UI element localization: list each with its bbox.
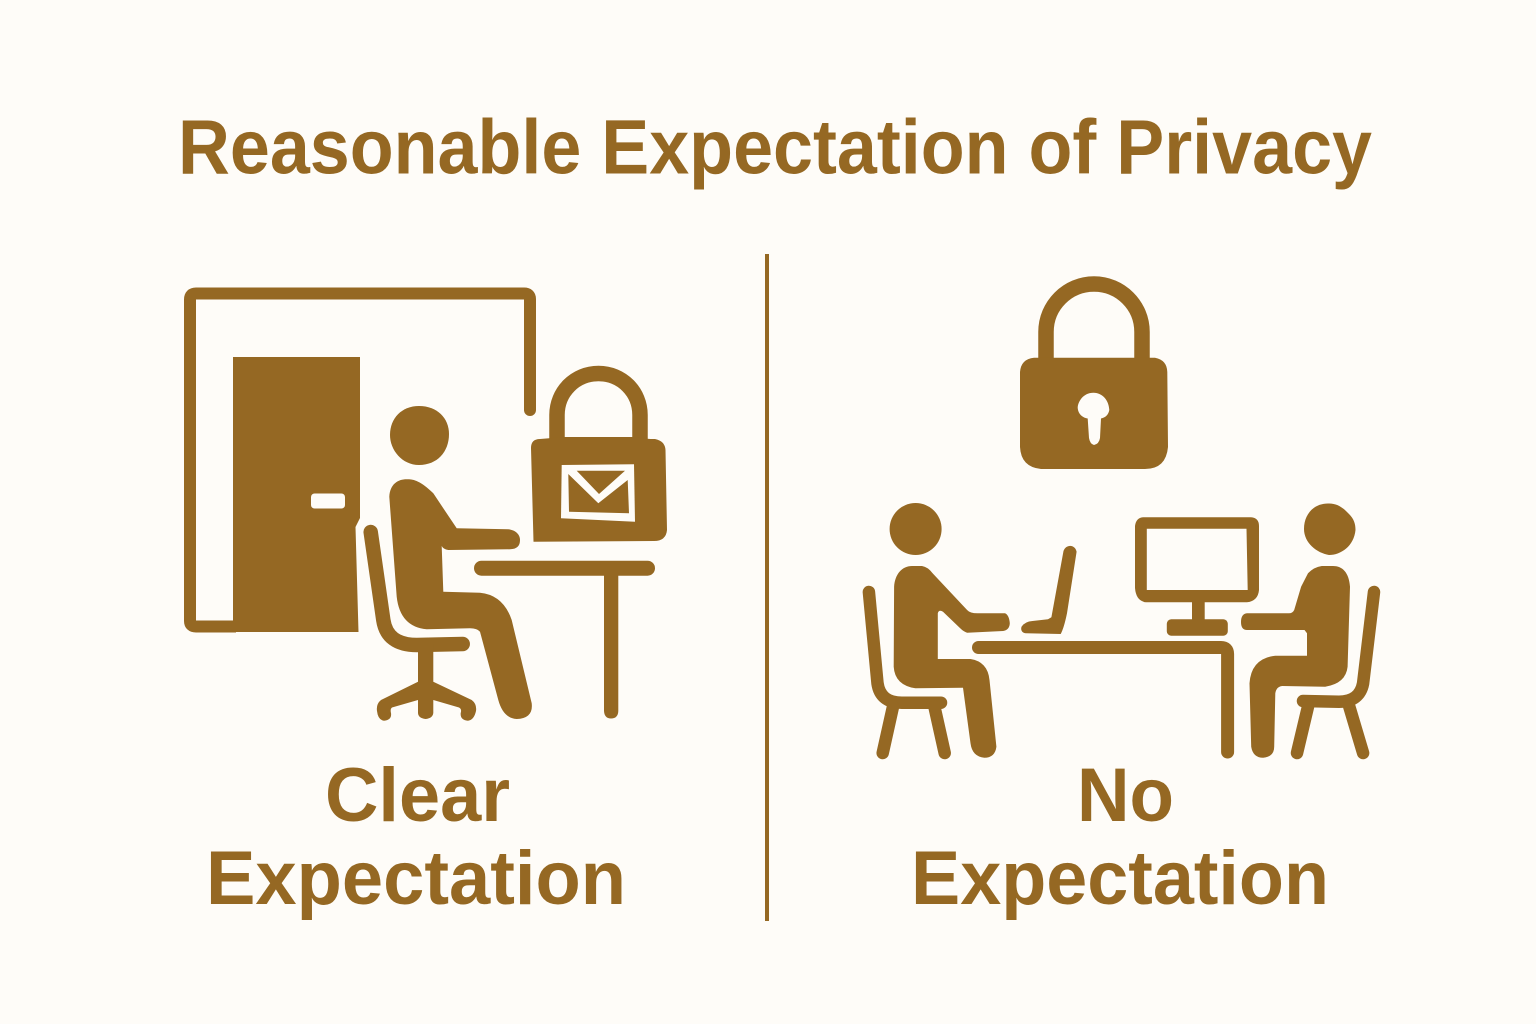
icon: room wall and door frame [190, 294, 530, 626]
label: no expectation: Expectation [911, 836, 1329, 921]
center divider [765, 254, 769, 921]
label: clear expectation: Clear [325, 753, 510, 838]
label: no expectation: No [1077, 753, 1174, 838]
panel: clear expectation [190, 294, 667, 921]
icon: large padlock [1020, 284, 1168, 469]
icon: right person [1241, 503, 1356, 758]
icon: left chair [869, 592, 945, 753]
icon: laptop [1021, 546, 1077, 634]
title: Reasonable Expectation of Privacy [178, 104, 1372, 190]
icon: shared desk [978, 648, 1228, 752]
icon: seated person at desk [389, 406, 532, 719]
icon: office chair [371, 532, 476, 721]
icon: left person [890, 503, 1010, 758]
icon: desk [474, 561, 655, 718]
label: clear expectation: Expectation [206, 836, 626, 921]
icon: wall end cap [524, 404, 536, 416]
label: clear expectation [206, 753, 626, 921]
icon: desktop monitor [1135, 517, 1259, 636]
icon: right chair [1297, 592, 1374, 753]
icon: padlock with envelope [531, 374, 667, 542]
label: no expectation [911, 753, 1329, 921]
icon: door [233, 357, 360, 632]
panel: no expectation [869, 284, 1374, 921]
